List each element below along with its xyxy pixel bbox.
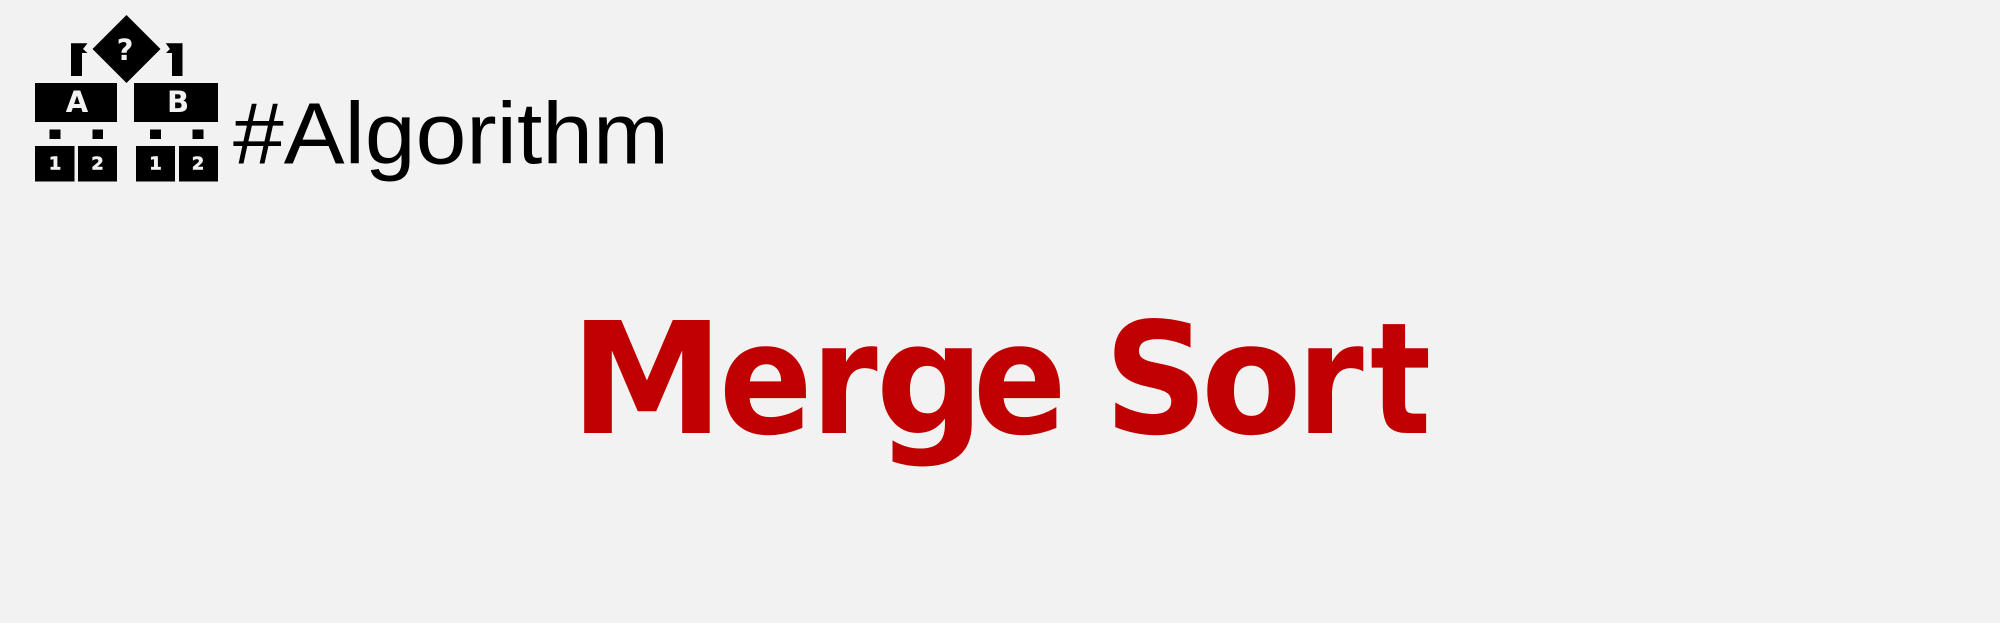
brand hashtag: #Algorithm: [233, 86, 669, 182]
leaf box B2: [179, 146, 218, 182]
option box B: [134, 83, 218, 122]
icon: decision tree logo: [35, 15, 218, 182]
title: S: [1104, 289, 1208, 470]
title: g: [876, 289, 984, 470]
arrow: left branch: [71, 43, 88, 76]
option box A: [35, 83, 117, 122]
option box A: A: [66, 85, 89, 119]
leaf box A1: 1: [49, 154, 61, 174]
title: e: [973, 289, 1067, 470]
leaf box A1: [35, 146, 74, 182]
title: e: [719, 289, 813, 470]
connector: B to 1: [150, 130, 161, 139]
icon: decision diamond: [92, 15, 160, 83]
icon: decision diamond: ?: [117, 33, 133, 67]
leaf box B1: [136, 146, 175, 182]
connector: B to 2: [192, 130, 204, 139]
leaf box B1: 1: [149, 154, 162, 174]
title: r: [811, 289, 878, 470]
title: t: [1370, 289, 1431, 470]
title: M: [570, 289, 724, 470]
connector: A to 1: [50, 130, 60, 139]
title: r: [1297, 289, 1364, 470]
leaf box B2: 2: [192, 154, 204, 174]
title: o: [1201, 289, 1302, 470]
leaf box A2: [78, 146, 117, 182]
leaf box A2: 2: [91, 154, 104, 174]
arrow: right branch: [166, 43, 182, 76]
connector: A to 2: [92, 130, 103, 139]
option box B: B: [167, 85, 189, 119]
